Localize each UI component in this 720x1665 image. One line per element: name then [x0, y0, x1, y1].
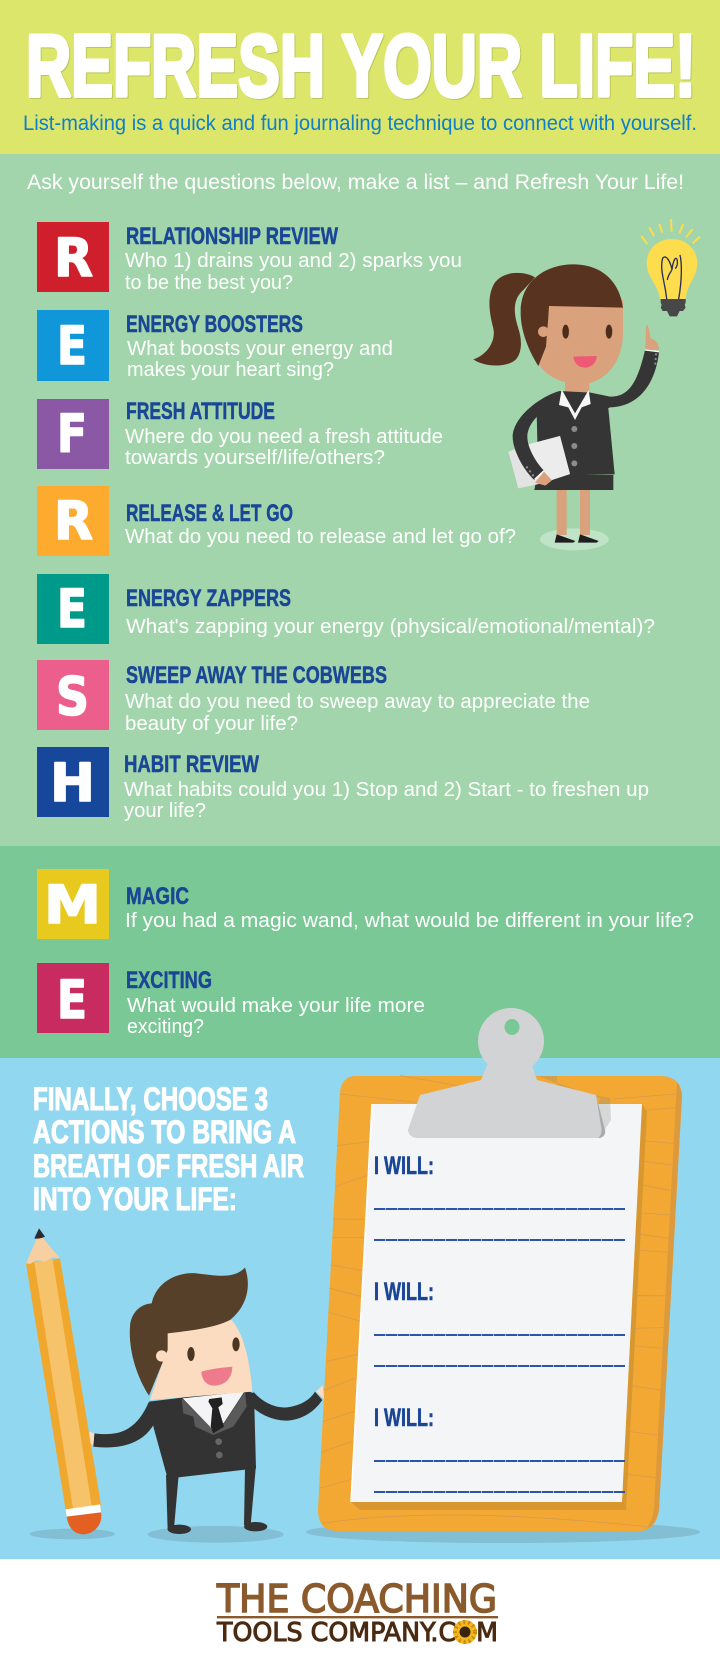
item: energy boosters: ENERGY BOOSTERS [126, 311, 303, 338]
item: exciting [37, 963, 425, 1038]
item: energy boosters: What boosts your energy and [127, 338, 393, 360]
item: energy boosters: E [57, 316, 87, 377]
item: relationship review [37, 222, 462, 294]
panel: me list background [0, 846, 720, 1058]
item: exciting: E [57, 970, 87, 1031]
item: sweep away the cobwebs [37, 660, 590, 735]
item: release and let go: R [54, 491, 93, 552]
heading: choose 3 actions [33, 1081, 304, 1217]
item: energy boosters: makes your heart sing? [127, 359, 334, 381]
panel: actions background [0, 1058, 720, 1559]
item: magic: M [44, 875, 101, 936]
item: energy zappers: E [57, 579, 87, 640]
item: fresh attitude: F [57, 404, 87, 465]
item: relationship review: R [54, 228, 93, 289]
logo: the coaching tools company: THE COACHING [216, 1577, 497, 1621]
logo: the coaching tools company [216, 1577, 498, 1648]
item: sweep away the cobwebs: SWEEP AWAY THE COBWEBS [126, 662, 387, 689]
item: release and let go: RELEASE & LET GO [126, 500, 293, 527]
item: release and let go [37, 486, 516, 556]
item: fresh attitude: towards yourself/life/others? [125, 447, 385, 469]
item: fresh attitude [37, 398, 443, 469]
item: energy zappers: ENERGY ZAPPERS [126, 585, 291, 612]
item: magic [37, 869, 694, 939]
item: habit review: your life? [124, 800, 206, 822]
item: magic: If you had a magic wand, what would be different in your life? [125, 910, 694, 932]
logo: the coaching tools company: TOOLS COMPANY.COM [216, 1618, 498, 1648]
item: magic: MAGIC [126, 883, 189, 910]
illustration: woman pointing at light bulb [473, 219, 700, 550]
item: relationship review: to be the best you? [125, 272, 293, 294]
item: habit review: What habits could you 1) Stop and 2) Start - to freshen up [124, 779, 649, 801]
item: fresh attitude: Where do you need a fresh attitude [125, 426, 443, 448]
item: exciting: What would make your life more [127, 995, 425, 1017]
panel: refresh list background [0, 154, 720, 846]
item: sweep away the cobwebs: beauty of your life? [125, 713, 298, 735]
item: relationship review: RELATIONSHIP REVIEW [126, 223, 338, 250]
heading: choose 3 actions: BREATH OF FRESH AIR [33, 1148, 304, 1184]
illustration: clipboard with i will list: I WILL: [374, 1404, 434, 1432]
illustration: clipboard with i will list [306, 1008, 700, 1543]
item: habit review: H [50, 753, 95, 814]
item: energy boosters [37, 310, 393, 381]
item: energy zappers [37, 574, 655, 644]
item: exciting: EXCITING [126, 967, 212, 994]
panel: header background [0, 0, 720, 154]
item: relationship review: Who 1) drains you and 2) sparks you [125, 250, 462, 272]
heading: choose 3 actions: INTO YOUR LIFE: [33, 1181, 237, 1217]
subtitle: List-making is a quick and fun journaling technique to connect with yourself. [23, 112, 697, 135]
heading: choose 3 actions: FINALLY, CHOOSE 3 [33, 1081, 268, 1117]
illustration: clipboard with i will list: I WILL: [374, 1278, 434, 1306]
item: sweep away the cobwebs: What do you need to sweep away to appreciate the [125, 691, 590, 713]
item: release and let go: What do you need to release and let go of? [125, 526, 516, 548]
item: habit review: HABIT REVIEW [124, 751, 259, 778]
panel: footer background [0, 1559, 720, 1665]
intro line: Ask yourself the questions below, make a list – and Refresh Your Life! [27, 171, 684, 194]
illustration: man holding pencil [26, 1228, 324, 1543]
item: exciting: exciting? [127, 1016, 204, 1038]
icon: sunflower [453, 1620, 477, 1644]
item: energy zappers: What's zapping your energy (physical/emotional/mental)? [126, 616, 655, 638]
item: sweep away the cobwebs: S [56, 667, 89, 728]
illustration: clipboard with i will list: I WILL: [374, 1152, 434, 1180]
heading: choose 3 actions: ACTIONS TO BRING A [33, 1114, 296, 1150]
item: fresh attitude: FRESH ATTITUDE [126, 398, 275, 425]
item: habit review [37, 747, 649, 822]
